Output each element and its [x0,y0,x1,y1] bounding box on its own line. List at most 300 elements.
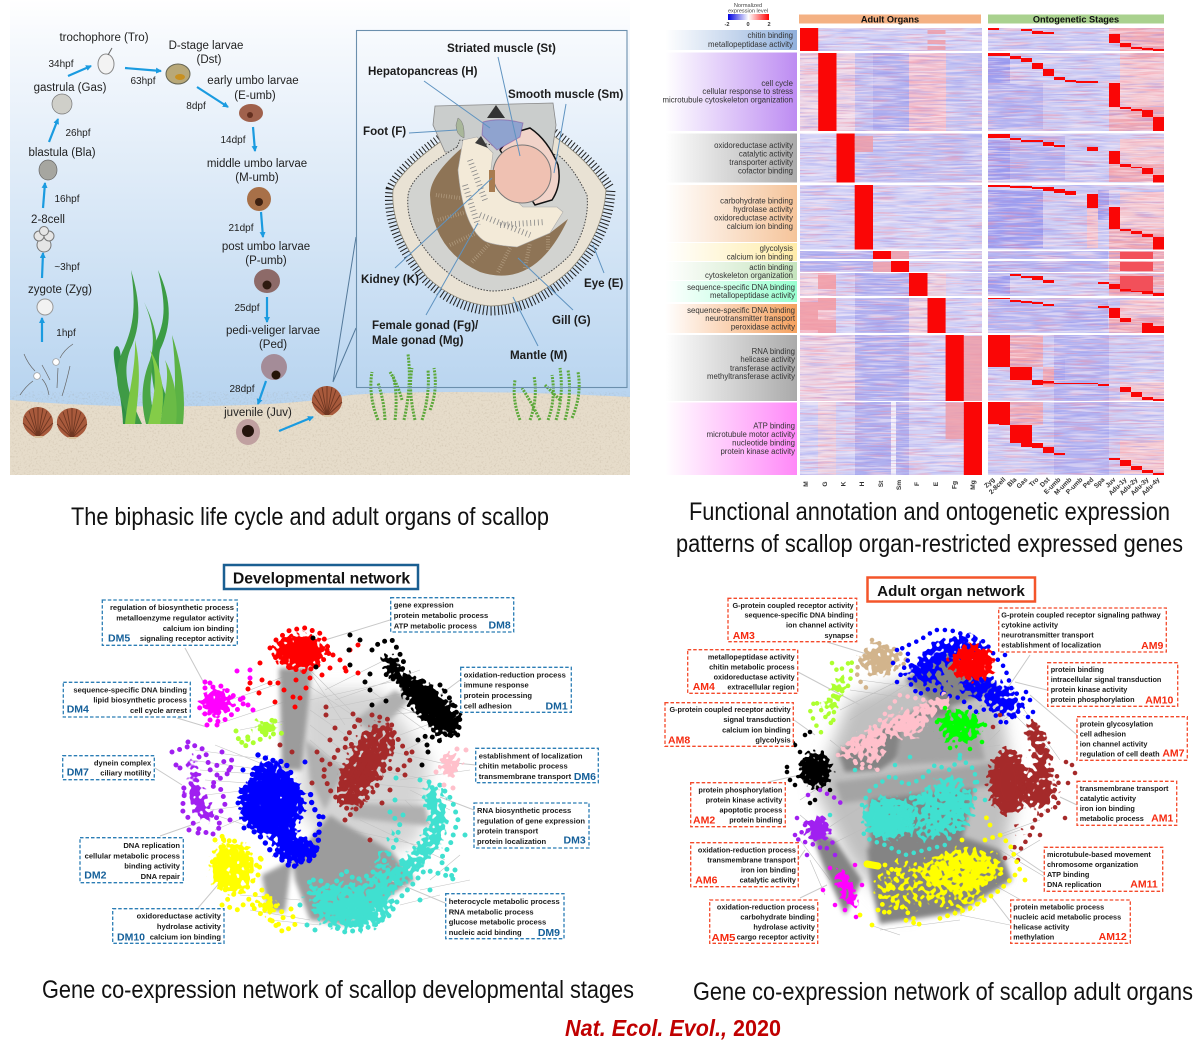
callout: AM8: AM8 [668,734,690,746]
GO term labels: glycolysis [760,244,793,253]
timing labels: ~3hpf [54,262,80,273]
callout: DM6: establishment of localization [479,751,583,760]
stage labels: 2-8cell [31,214,65,226]
GO term labels: metallopeptidase activity [710,291,795,300]
module: purple cluster [172,742,232,835]
callout: AM7: protein glycosylation [1080,719,1153,728]
stage labels: juvenile (Juv) [223,407,292,419]
panel: biphasic life cycle [10,0,630,475]
module: maroon cluster [986,715,1075,860]
smooth muscle [500,128,559,205]
callout: DM2: cellular metabolic process [85,851,180,860]
callout: AM12 [1011,900,1130,943]
callout: DM3 [474,803,589,848]
inset box [356,30,627,388]
callout: DM1: cell adhesion [464,701,512,710]
callout: AM6 [691,843,798,887]
timing labels: 34hpf [48,59,74,70]
edge bundles [190,660,470,925]
colour scale legend: expression level [728,8,768,14]
timing labels: 25dpf [234,303,260,314]
module: green-yellow cluster [810,660,852,738]
callout: AM1: transmembrane transport [1080,784,1169,793]
callout: DM7: DM7 [67,766,89,778]
GO term labels: nucleotide binding [732,438,795,448]
module: magenta cluster [193,670,253,725]
title: Adult organ network [868,578,1035,602]
callout: AM7: AM7 [1162,748,1185,760]
callout: AM8 [665,703,793,746]
stage labels [28,32,320,419]
caption: developmental network: Gene co-expression network of scallop developmental stages [42,976,634,1004]
callout: AM12: methylation [1013,933,1054,942]
background: sandy sea floor [10,392,630,475]
stage labels: blastula (Bla) [28,147,96,159]
callout: DM8: gene expression [394,601,454,610]
callout: AM1: iron ion binding [1080,804,1135,813]
GO term labels: catalytic activity [739,150,793,158]
stage labels: (Dst) [197,54,222,66]
anatomy labels: Male gonad (Mg) [372,334,464,347]
callout: AM3: AM3 [733,630,755,642]
callout: AM1: catalytic activity [1080,794,1137,803]
timing labels: 16hpf [54,194,80,205]
callout: AM6: oxidation-reduction process [698,846,796,855]
callout: AM10: protein phosphorylation [1051,695,1135,704]
stage axis labels: Ped [1082,476,1095,490]
timing labels: 26hpf [65,128,91,139]
foot [456,118,464,138]
callout: DM7: dynein complex [94,758,152,767]
callout: AM5: oxidation-reduction process [717,903,815,912]
citation: Nat. Ecol. Evol., 2020 [565,1015,781,1041]
timing labels [48,59,260,395]
GO term labels: calcium ion binding [727,252,793,262]
stage axis labels: M-umb [1053,476,1073,497]
stage axis labels: P-umb [1065,476,1084,496]
anatomy labels: Foot (F) [363,125,406,138]
GO term labels: peroxidase activity [731,322,795,332]
GO term labels: actin binding [749,263,793,272]
GO term gradient strips [665,30,797,475]
callout: DM4 [63,682,190,717]
callout: AM11: microtubule-based movement [1047,850,1151,859]
callout: AM3: G-protein coupled receptor activity [732,601,855,610]
callout: DM2: DNA replication [123,841,180,850]
callout: DM9: heterocycle metabolic process [449,897,560,906]
module: black cluster [349,635,460,765]
GO term labels: ATP binding [753,422,795,430]
callout: AM9: cytokine activity [1001,621,1059,630]
timing labels: 63hpf [130,76,156,87]
life-cycle arrows [42,66,313,431]
module: green-yellow cluster [236,716,284,746]
title: Developmental network: Developmental network [233,570,410,588]
colour scale legend: Normalized [734,3,762,9]
anatomy labels: Gill (G) [552,314,591,327]
anatomy labels: Striated muscle (St) [447,42,556,55]
module: red cluster [248,628,358,707]
callout: AM11: ATP binding [1047,870,1089,879]
callout: AM9: neurotransmitter transport [1001,631,1094,640]
stage axis labels: Adu-1y [1108,476,1129,497]
callout: AM4 [688,650,798,693]
organ axis labels: Sm [896,480,903,490]
seagrass: large central clump [114,270,184,424]
organ axis labels: K [840,481,848,486]
callout: DM8: protein metabolic process [394,611,488,620]
kidney [489,170,495,192]
stage labels: gastrula (Gas) [34,82,107,94]
GO term labels: sequence-specific DNA binding [687,306,795,315]
stage axis labels: 2-8cell [988,476,1008,496]
GO term labels: oxidoreductase activity [714,141,793,150]
callout: DM5 [102,600,237,645]
callout: AM2: AM2 [693,814,715,826]
callout: AM5: AM5 [712,932,736,944]
organ axis labels: Fg [952,481,958,489]
callout: DM4: sequence-specific DNA binding [73,685,187,694]
hinge triangle [487,105,505,118]
callout: AM4: chitin metabolic process [709,662,795,672]
organ axis labels: Mg [970,480,977,490]
module: yellow cluster [860,815,1025,925]
stage labels: (E-umb) [234,90,276,102]
background: sea water [10,0,630,410]
GO term labels: carbohydrate binding [720,196,793,206]
callout: DM9 [446,894,564,939]
GO term labels: cell cycle [761,79,793,88]
adult scallop with inset [312,386,342,417]
callout: DM5: regulation of biosynthetic process [110,603,234,612]
callout: AM5: cargo receptor activity [737,933,816,942]
callout: DM10: calcium ion binding [150,932,221,941]
panel: heatmap [663,3,1164,497]
stage axis labels: Zyg [983,476,996,490]
callout: AM6: catalytic activity [740,876,797,885]
hinge [433,103,556,152]
stage labels: (M-umb) [235,172,279,184]
callout: AM8: signal transduction [723,715,791,724]
timing labels: 28dpf [229,384,255,395]
gill [430,147,568,276]
GO term labels: cellular response to stress [702,87,793,96]
anatomy labels: Hepatopancreas (H) [368,65,478,78]
gametes and sperm [20,344,73,396]
colour scale legend [725,3,771,28]
stage axis labels: Spa [1093,476,1107,490]
callout: AM8: calcium ion binding [722,725,791,734]
callout: DM10: oxidoreductase activity [137,912,222,921]
anatomy labels: Mantle (M) [510,349,567,362]
organ axis labels: G [822,481,829,487]
callout: AM3: sequence-specific DNA binding [744,611,854,620]
callout: DM6: chitin metabolic process [479,762,568,771]
stage labels: (P-umb) [245,255,287,267]
caption: life cycle: The biphasic life cycle and adult organs of scallop [71,503,549,531]
callout: AM4: metallopeptidase activity [708,652,796,662]
stage labels: zygote (Zyg) [28,284,92,296]
organ axis labels: St [878,480,885,487]
GO term labels: methyltransferase activity [707,372,795,381]
title: Developmental network [224,565,418,589]
callout: AM8: G-protein coupled receptor activity [669,705,792,714]
adult scallop two [57,408,87,439]
title: Adult organ network: Adult organ network [877,583,1025,600]
GO term labels: microtubule motor activity [707,430,795,439]
callout: DM9: nucleic acid binding [449,928,522,937]
hepatopancreas [482,120,523,150]
callout: DM3: DM3 [564,834,586,846]
GO term labels: calcium ion binding [727,222,793,231]
callout: DM3: regulation of gene expression [477,816,585,825]
GO term labels [663,31,796,456]
callout: DM4: DM4 [67,704,89,716]
callout: DM5: signaling receptor activity [140,634,235,643]
callout: DM3: protein transport [477,827,539,836]
anatomy labels: Female gonad (Fg)/ [372,319,479,332]
callout: DM10 [113,909,224,944]
callout: AM2 [691,783,785,827]
callout: DM2: DM2 [84,870,107,882]
callout: DM1: DM1 [546,701,568,713]
callout: DM6: DM6 [574,771,596,783]
GO term labels: protein kinase activity [720,447,795,456]
adult scallops on the sand [23,407,53,438]
timing labels: 1hpf [56,328,76,339]
callout: AM7 [1077,717,1187,760]
callout: AM12: nucleic acid metabolic process [1013,913,1121,922]
callout: AM6: AM6 [695,874,718,886]
callout: AM12: protein metabolic process [1013,903,1104,912]
anatomy labels: Eye (E) [584,277,623,290]
GO term labels: chitin binding [747,31,793,40]
stage labels: early umbo larvae [207,75,299,87]
stage labels: post umbo larvae [222,241,310,253]
stage labels: middle umbo larvae [207,158,307,170]
organ axis labels: H [859,481,866,486]
striated muscle [493,145,551,203]
header: Adult Organs [799,14,981,24]
module: turquoise cluster [830,755,985,855]
callout: AM7: ion channel activity [1080,739,1148,748]
stage axis labels: Adu-4y [1141,476,1162,497]
anatomy leader lines [395,57,604,346]
stage axis labels [983,476,1162,497]
module: purple cluster [795,790,843,855]
GO term labels: microtubule cytoskeleton organization [663,96,793,104]
stage labels: pedi-veliger larvae [226,325,320,337]
colour scale legend: 0 [746,22,750,28]
callout: AM2: protein binding [729,816,782,825]
GO term labels: sequence-specific DNA binding [687,283,795,292]
heatmap: adult organs [800,28,982,475]
module: maroon cluster [280,707,412,840]
module: blue cluster [893,630,1033,725]
callout: AM6: iron ion binding [741,866,796,875]
GO term labels: neurotransmitter transport [705,314,796,323]
GO term labels: metallopeptidase activity [708,40,793,49]
callout: DM9: glucose metabolic process [449,918,546,927]
callout: AM1: metabolic process [1080,814,1144,823]
callout: DM4: lipid biosynthetic process [93,695,187,704]
connector lines [768,642,1077,921]
callout: AM2: apoptotic process [719,806,782,815]
callout: AM6: transmembrane transport [707,856,797,865]
anatomy labels [361,42,623,362]
dark tissue [475,136,488,148]
callout: AM9: G-protein coupled receptor signaling pathway [1001,611,1162,620]
callout: AM9: establishment of localization [1001,641,1101,650]
anatomy labels: Kidney (K) [361,273,419,286]
callout: AM11: chromosome organization [1047,860,1138,869]
stage axis labels: Adu-3y [1130,476,1151,497]
callout: AM2: protein phosphorylation [698,785,782,794]
callout: DM10: DM10 [117,932,145,944]
header: Ontogenetic Stages [988,14,1164,24]
scallop anatomy drawing [392,103,608,308]
module: black cluster [787,732,834,803]
callout: DM3: RNA biosynthetic process [477,806,571,815]
callout: DM7 [63,756,154,780]
stage axis labels: Juv [1104,476,1118,489]
stage axis labels: E-umb [1043,476,1062,496]
white rows between blocks [800,51,982,402]
callout: DM3: protein localization [477,837,547,846]
callout: DM8: DM8 [489,619,511,631]
callout: DM6 [476,748,598,783]
stage labels: D-stage larvae [169,40,243,52]
module: pink cluster [838,695,945,770]
callout: AM11 [1044,847,1163,891]
callout: AM10: protein binding [1051,665,1104,674]
GO term labels: hydrolase activity [733,205,793,214]
stage labels: (Ped) [259,339,287,351]
callout: AM2: protein kinase activity [706,795,783,804]
callout: AM3: synapse [824,631,854,640]
module: magenta cluster [823,865,862,917]
callout: AM9: AM9 [1141,640,1163,652]
callout: DM5: DM5 [108,632,130,644]
GO term labels: transferase activity [730,364,795,373]
callout: AM5: carbohydrate binding [740,913,815,922]
callout: DM2 [80,838,183,883]
callout: DM9: DM9 [538,927,560,939]
module: tan cluster [856,640,908,690]
callout: AM1 [1077,781,1177,825]
callout: AM12: AM12 [1099,931,1127,943]
callout: AM12: helicase activity [1013,923,1070,932]
callout: DM1: immune response [464,681,529,690]
GO term labels: transporter activity [729,158,793,167]
callout: AM10: protein kinase activity [1051,685,1128,694]
callout: AM3 [728,598,857,642]
callout: AM5 [710,900,818,944]
inner mantle [408,140,587,291]
callout: AM10: AM10 [1145,694,1173,706]
visceral body [458,137,563,247]
module: blue cluster [237,755,323,868]
callout: AM7: regulation of cell death [1080,749,1160,758]
GO term labels: cofactor binding [738,166,793,176]
callout: DM2: binding activity [124,862,181,871]
callout: AM10 [1048,663,1178,706]
callout: AM4: oxidoreductase activity [714,672,796,682]
organ axis labels: E [933,481,940,486]
callout: DM4: cell cycle arrest [130,706,187,715]
organ axis labels: M [803,481,810,487]
callout: AM11: DNA replication [1047,880,1101,889]
callout: DM5: calcium ion binding [163,624,234,633]
callout: DM7: ciliary motility [100,769,152,778]
callout: AM5: hydrolase activity [753,923,816,932]
callout: AM7: cell adhesion [1080,729,1126,738]
module: yellow cluster [207,835,295,932]
timing labels: 21dpf [228,223,254,234]
callout: DM10: hydrolase activity [157,922,222,931]
GO term labels: helicase activity [740,355,795,364]
callout: DM1: oxidation-reduction process [464,670,566,679]
callout: AM8: glycolysis [755,735,791,744]
colour scale legend: 2 [767,22,771,28]
panel: developmental network [63,565,598,944]
caption: heatmap [676,498,1183,558]
GO term labels: RNA binding [752,347,795,356]
module: red cluster [947,642,997,684]
callout: DM8 [391,598,514,632]
header: Ontogenetic Stages: Ontogenetic Stages [1033,14,1119,24]
callout: DM1: protein processing [464,691,532,700]
callout: AM4: extracellular region [727,682,795,692]
GO term labels: oxidoreductase activity [714,214,793,222]
callout: DM2: DNA repair [141,872,180,881]
stage axis labels: Dst [1039,476,1052,489]
organ axis labels [803,480,977,490]
callout: DM1 [461,667,571,713]
callout: AM3: ion channel activity [786,621,855,630]
edge bundles [800,650,1060,935]
seagrass: small clumps inside inset [371,354,579,420]
callout: AM10: intracellular signal transduction [1051,675,1161,684]
header: Adult Organs: Adult Organs [861,14,919,24]
callout: DM5: metalloenzyme regulator activity [116,614,235,622]
module: green cluster [934,706,986,749]
stage axis labels: Tro [1028,476,1040,489]
timing labels: 14dpf [220,135,246,146]
callout: AM9 [999,608,1166,652]
zoom lines to inset [333,237,356,382]
callout: DM9: RNA metabolic process [449,907,534,916]
stage axis labels: Gas [1016,476,1030,490]
stage axis labels: Adu-2y [1119,476,1140,497]
organ axis labels: F [914,482,921,486]
shell with tentacles [392,132,608,308]
module: turquoise cluster [298,778,465,933]
callout: AM11: AM11 [1130,879,1158,891]
stage axis labels: Bla [1006,476,1019,489]
stage labels: trochophore (Tro) [59,32,149,44]
callout: AM1: AM1 [1151,813,1173,825]
module: pink cluster [436,749,466,788]
connector lines [155,620,476,908]
anatomy labels: Smooth muscle (Sm) [508,88,623,101]
callout: AM4: AM4 [693,681,715,693]
panel: adult organ network [665,578,1187,944]
callout: DM8: ATP metabolic process [394,621,477,630]
embryo and larval stage icons [34,48,287,445]
GO term labels: cytoskeleton organization [705,271,793,280]
colour scale legend: -2 [725,22,729,28]
